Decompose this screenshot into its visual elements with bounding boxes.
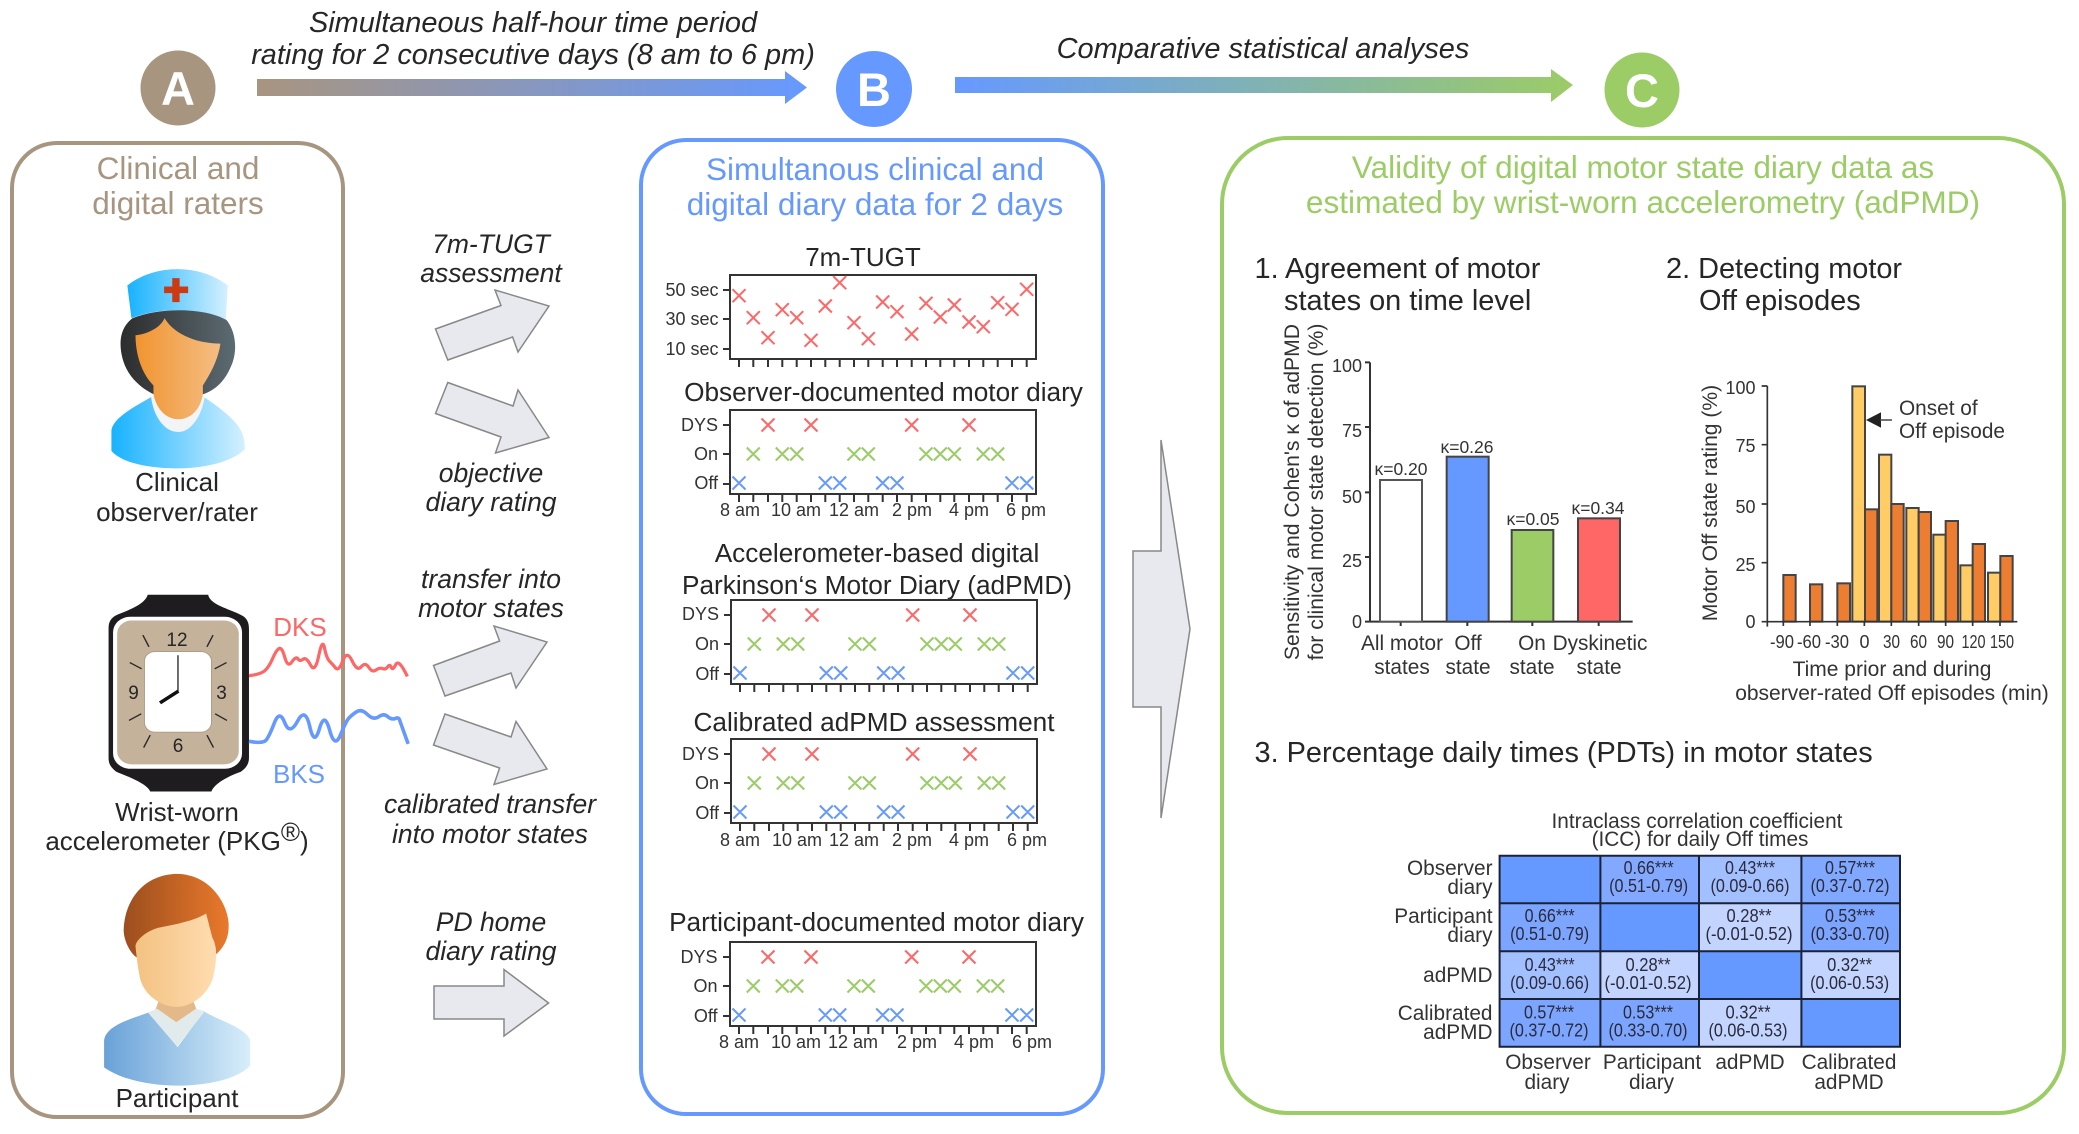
chart: calibrated adPMD: Calibrated adPMD assessment — [694, 707, 1055, 737]
table: ICC matrix: 0.66*** — [1525, 906, 1575, 926]
chart: Off episode histogram: 60 — [1910, 632, 1927, 652]
chart: sensitivity bar chart: κ=0.20 — [1374, 459, 1428, 479]
table: ICC matrix: 0.28** — [1726, 906, 1772, 926]
chart: sensitivity bar chart: κ=0.05 — [1506, 509, 1560, 529]
table: ICC matrix: Participant — [1603, 1051, 1701, 1074]
label: wrist-worn accelerometer: Wrist-worn — [115, 797, 239, 827]
panel heading C: estimated by wrist-worn accelerometry (adPMD) — [1306, 184, 1980, 220]
icon: wrist-worn accelerometer watch: 12 — [166, 630, 188, 651]
chart: accelerometer-based adPMD: On — [695, 634, 719, 654]
callout: onset of Off episode: Onset of — [1899, 397, 1978, 420]
chart: Off episode histogram: 75 — [1735, 436, 1756, 456]
chart: sensitivity bar chart: κ=0.34 — [1571, 498, 1625, 518]
chart: observer-documented motor diary: 4 pm — [949, 500, 989, 520]
signal: DKS trace — [249, 612, 407, 676]
chart: sensitivity bar chart: for clinical motor state detection (%) — [1305, 324, 1328, 660]
table: ICC matrix — [1394, 810, 1900, 1094]
chart: sensitivity bar chart: state — [1445, 656, 1491, 679]
table: ICC matrix: (0.51-0.79) — [1609, 876, 1688, 896]
chart: sensitivity bar chart — [1281, 324, 1647, 679]
heading 1: agreement: states on time level — [1284, 285, 1531, 317]
table: ICC matrix: adPMD — [1814, 1071, 1884, 1094]
chart: participant-documented motor diary: 4 pm — [954, 1032, 994, 1052]
arrow: objective diary rating — [436, 382, 549, 453]
chart: 7m-TUGT: 30 sec — [665, 309, 718, 329]
table: ICC matrix: (0.06-0.53) — [1708, 1020, 1788, 1040]
badge B: B — [857, 63, 891, 116]
chart: sensitivity bar chart: 75 — [1342, 421, 1362, 441]
icon: wrist-worn accelerometer watch — [109, 595, 249, 792]
chart: calibrated adPMD: 10 am — [772, 830, 822, 850]
table: ICC matrix: (0.37-0.72) — [1810, 876, 1890, 896]
panel: validity of digital diary — [1222, 138, 2064, 1113]
label: calibrated transfer — [384, 789, 597, 849]
chart: calibrated adPMD: 2 pm — [892, 830, 932, 850]
panel: clinical and digital raters — [12, 143, 408, 1117]
chart: 7m-TUGT: 10 sec — [665, 339, 718, 359]
chart: sensitivity bar chart: Sensitivity and Cohen's κ of adPMD — [1281, 324, 1304, 660]
chart: sensitivity bar chart: All motor — [1361, 632, 1443, 655]
table: ICC matrix: (ICC) for daily Off times — [1592, 828, 1808, 851]
label: 7m-TUGT assessment: assessment — [420, 258, 563, 288]
label: clinical observer — [96, 467, 258, 527]
table: ICC matrix: Participant — [1394, 905, 1493, 928]
chart: Off episode histogram: 0 — [1859, 632, 1870, 652]
header text: half-hour rating period — [251, 7, 815, 71]
heading 2: detecting Off — [1666, 253, 1902, 317]
chart: calibrated adPMD: Off — [695, 803, 720, 823]
chart: observer-documented motor diary: 10 am — [771, 500, 821, 520]
chart: calibrated adPMD: 6 pm — [1007, 830, 1047, 850]
chart: calibrated adPMD: DYS — [682, 744, 719, 764]
badge B — [836, 51, 912, 127]
chart: Off episode histogram: -90 — [1770, 632, 1794, 652]
table: ICC matrix: adPMD — [1715, 1051, 1785, 1074]
header text: half-hour rating period: rating for 2 consecutive days (8 am to 6 pm) — [251, 39, 815, 71]
chart: Off episode histogram: Time prior and during — [1793, 658, 1991, 681]
table: ICC matrix: 0.57*** — [1524, 1002, 1574, 1022]
label: 7m-TUGT assessment: 7m-TUGT — [432, 229, 552, 259]
chart: calibrated adPMD: 12 am — [829, 830, 879, 850]
chart: sensitivity bar chart: 50 — [1342, 487, 1362, 507]
chart: participant-documented motor diary — [669, 907, 1085, 1052]
panel heading B: Simultanous clinical and — [706, 151, 1044, 187]
chart: observer-documented motor diary — [681, 377, 1084, 520]
arrow: large B to C — [1133, 440, 1190, 818]
header text: half-hour rating period: Simultaneous half-hour time period — [309, 7, 758, 39]
table: ICC matrix: Calibrated — [1398, 1002, 1492, 1025]
chart: participant-documented motor diary: 8 am — [719, 1032, 759, 1052]
panel heading A — [92, 150, 264, 221]
chart: sensitivity bar chart: Dyskinetic — [1553, 632, 1647, 655]
chart: calibrated adPMD: 4 pm — [949, 830, 989, 850]
chart: Off episode histogram: Motor Off state rating (%) — [1699, 385, 1722, 621]
label: wrist-worn accelerometer: ® — [281, 817, 300, 847]
chart: observer-documented motor diary: 12 am — [829, 500, 879, 520]
label: transfer into motor states: transfer into — [421, 564, 561, 594]
chart: Off episode histogram — [1699, 378, 2049, 705]
label: PD home diary rating — [425, 907, 557, 966]
table: ICC matrix: 0.57*** — [1825, 858, 1875, 878]
chart: sensitivity bar chart: Off — [1454, 632, 1482, 655]
chart: calibrated adPMD — [682, 707, 1055, 850]
label: objective diary rating — [425, 458, 557, 517]
arrow: 7m-TUGT — [436, 290, 549, 360]
table: ICC matrix: (0.37-0.72) — [1510, 1020, 1588, 1040]
icon: wrist-worn accelerometer watch: 6 — [173, 736, 183, 757]
label: calibrated transfer: into motor states — [392, 819, 588, 849]
arrow: PD home diary — [434, 970, 549, 1036]
table: ICC matrix: Observer — [1407, 857, 1493, 880]
label: participant: Participant — [116, 1083, 239, 1113]
table: ICC matrix: (0.06-0.53) — [1810, 973, 1889, 993]
chart: participant-documented motor diary: 10 am — [771, 1032, 821, 1052]
icon: wrist-worn accelerometer watch: 9 — [128, 683, 139, 704]
label: objective diary rating: objective — [439, 458, 543, 488]
label: clinical observer: Clinical — [135, 467, 219, 497]
chart: accelerometer-based adPMD: Parkinson‘s Motor Diary (adPMD) — [682, 570, 1072, 600]
table: ICC matrix: 0.43*** — [1725, 858, 1775, 878]
table: ICC matrix: (0.33-0.70) — [1608, 1020, 1688, 1040]
chart: sensitivity bar chart: κ=0.26 — [1440, 437, 1494, 457]
table: ICC matrix: 0.53*** — [1623, 1002, 1673, 1022]
table: ICC matrix: diary — [1524, 1071, 1570, 1094]
chart: sensitivity bar chart: state — [1576, 656, 1622, 679]
chart: participant-documented motor diary: 12 am — [828, 1032, 878, 1052]
chart: sensitivity bar chart: state — [1509, 656, 1555, 679]
heading 1: agreement: 1. Agreement of motor — [1254, 253, 1541, 285]
chart: Off episode histogram: 120 — [1962, 632, 1986, 652]
chart: participant-documented motor diary: Off — [694, 1006, 718, 1026]
label: 7m-TUGT assessment — [420, 229, 563, 288]
chart: sensitivity bar chart: 25 — [1342, 551, 1362, 571]
callout: onset of Off episode: Off episode — [1899, 420, 2005, 443]
table: ICC matrix: (0.33-0.70) — [1810, 924, 1890, 944]
panel heading A: Clinical and — [97, 150, 259, 186]
chart: Off episode histogram: 25 — [1735, 555, 1756, 575]
chart: participant-documented motor diary: Participant-documented motor diary — [669, 907, 1085, 937]
chart: Off episode histogram: observer-rated Off episodes (min) — [1735, 682, 2049, 705]
panel heading C: Validity of digital motor state diary data as — [1352, 149, 1934, 185]
label: transfer into motor states — [418, 564, 564, 623]
table: ICC matrix: adPMD — [1423, 964, 1492, 987]
chart: calibrated adPMD: 8 am — [720, 830, 760, 850]
chart: participant-documented motor diary: DYS — [680, 947, 718, 967]
icon: wrist-worn accelerometer watch: 3 — [216, 683, 227, 704]
arrow: calibrated transfer — [434, 714, 547, 784]
chart: observer-documented motor diary: DYS — [681, 415, 718, 435]
label: PD home diary rating: PD home — [436, 907, 546, 937]
chart: sensitivity bar chart: On — [1518, 632, 1546, 655]
panel heading B — [687, 151, 1063, 222]
table: ICC matrix: diary — [1447, 924, 1493, 947]
panel: simultaneous diary data — [641, 140, 1103, 1114]
chart: accelerometer-based adPMD: Accelerometer-based digital — [715, 538, 1039, 568]
arrow: B to C — [955, 69, 1573, 102]
chart: Off episode histogram: 50 — [1735, 497, 1756, 517]
label: objective diary rating: diary rating — [425, 487, 557, 517]
label: clinical observer: observer/rater — [96, 497, 258, 527]
table: ICC matrix: (-0.01-0.52) — [1604, 973, 1692, 993]
table: ICC matrix: diary — [1629, 1071, 1675, 1094]
signal: DKS trace: DKS — [273, 612, 327, 642]
callout: onset of Off episode — [1866, 397, 2005, 443]
chart: participant-documented motor diary: On — [693, 976, 718, 996]
label: wrist-worn accelerometer: ) — [300, 826, 309, 856]
badge A — [140, 50, 216, 126]
heading 3: percentage daily times: 3. Percentage daily times (PDTs) in motor states — [1254, 737, 1873, 769]
chart: Off episode histogram: -60 — [1797, 632, 1821, 652]
panel heading A: digital raters — [92, 185, 264, 221]
chart: observer-documented motor diary: 2 pm — [892, 500, 932, 520]
chart: Off episode histogram: 90 — [1937, 632, 1954, 652]
chart: Off episode histogram: 100 — [1725, 378, 1756, 398]
chart: observer-documented motor diary: 6 pm — [1006, 500, 1046, 520]
chart: sensitivity bar chart: states — [1374, 656, 1430, 679]
label: wrist-worn accelerometer: accelerometer (PKG — [45, 826, 281, 856]
label: wrist-worn accelerometer — [45, 797, 309, 856]
chart: accelerometer-based adPMD — [682, 538, 1072, 692]
chart: sensitivity bar chart: 100 — [1332, 356, 1362, 376]
badge A: A — [161, 62, 195, 115]
chart: 7m-TUGT: 50 sec — [665, 280, 718, 300]
signal: BKS trace: BKS — [273, 759, 325, 789]
table: ICC matrix: diary — [1447, 876, 1493, 899]
table: ICC matrix: 0.28** — [1626, 955, 1670, 975]
table: ICC matrix: Intraclass correlation coefficient — [1552, 810, 1843, 833]
table: ICC matrix: (-0.01-0.52) — [1706, 924, 1792, 944]
chart: observer-documented motor diary: Off — [694, 473, 719, 493]
header text: comparative analyses: Comparative statistical analyses — [1057, 33, 1469, 65]
chart: accelerometer-based adPMD: DYS — [682, 604, 719, 624]
chart: observer-documented motor diary: 8 am — [720, 500, 760, 520]
table: ICC matrix: Observer — [1505, 1051, 1591, 1074]
badge C — [1604, 52, 1680, 128]
heading 2: detecting Off: 2. Detecting motor — [1666, 253, 1902, 285]
chart: observer-documented motor diary: On — [694, 444, 718, 464]
table: ICC matrix: 0.43*** — [1525, 955, 1575, 975]
label: calibrated transfer: calibrated transfer — [384, 789, 597, 819]
arrow: A to B — [257, 71, 807, 104]
table: ICC matrix: 0.66*** — [1624, 858, 1674, 878]
chart: Off episode histogram: 0 — [1745, 612, 1756, 632]
panel heading C — [1306, 149, 1980, 220]
label: PD home diary rating: diary rating — [425, 936, 557, 966]
signal: BKS trace — [249, 711, 408, 789]
chart: Off episode histogram: 30 — [1883, 632, 1900, 652]
badge C: C — [1625, 64, 1659, 117]
chart: 7m-TUGT: 7m-TUGT — [805, 242, 921, 272]
chart: Off episode histogram: -30 — [1825, 632, 1849, 652]
heading 1: agreement — [1254, 253, 1541, 317]
chart: participant-documented motor diary: 2 pm — [897, 1032, 937, 1052]
icon: participant — [104, 874, 250, 1086]
table: ICC matrix: adPMD — [1423, 1021, 1492, 1044]
table: ICC matrix: 0.32** — [1726, 1002, 1770, 1022]
icon: nurse — [111, 269, 245, 468]
table: ICC matrix: 0.32** — [1827, 955, 1872, 975]
chart: accelerometer-based adPMD: Off — [695, 664, 720, 684]
arrow: transfer into motor states — [434, 626, 547, 696]
table: ICC matrix: (0.09-0.66) — [1710, 876, 1790, 896]
chart: 7m-TUGT — [665, 242, 1036, 367]
label: transfer into motor states: motor states — [418, 593, 564, 623]
chart: Off episode histogram: 150 — [1990, 632, 2014, 652]
table: ICC matrix: 0.53*** — [1825, 906, 1875, 926]
chart: sensitivity bar chart: 0 — [1352, 612, 1362, 632]
chart: observer-documented motor diary: Observer-documented motor diary — [684, 377, 1084, 407]
heading 2: detecting Off: Off episodes — [1699, 285, 1861, 317]
table: ICC matrix: (0.09-0.66) — [1510, 973, 1589, 993]
table: ICC matrix: Calibrated — [1802, 1051, 1896, 1074]
chart: participant-documented motor diary: 6 pm — [1012, 1032, 1052, 1052]
panel heading B: digital diary data for 2 days — [687, 186, 1063, 222]
chart: calibrated adPMD: On — [695, 773, 719, 793]
table: ICC matrix: (0.51-0.79) — [1510, 924, 1589, 944]
